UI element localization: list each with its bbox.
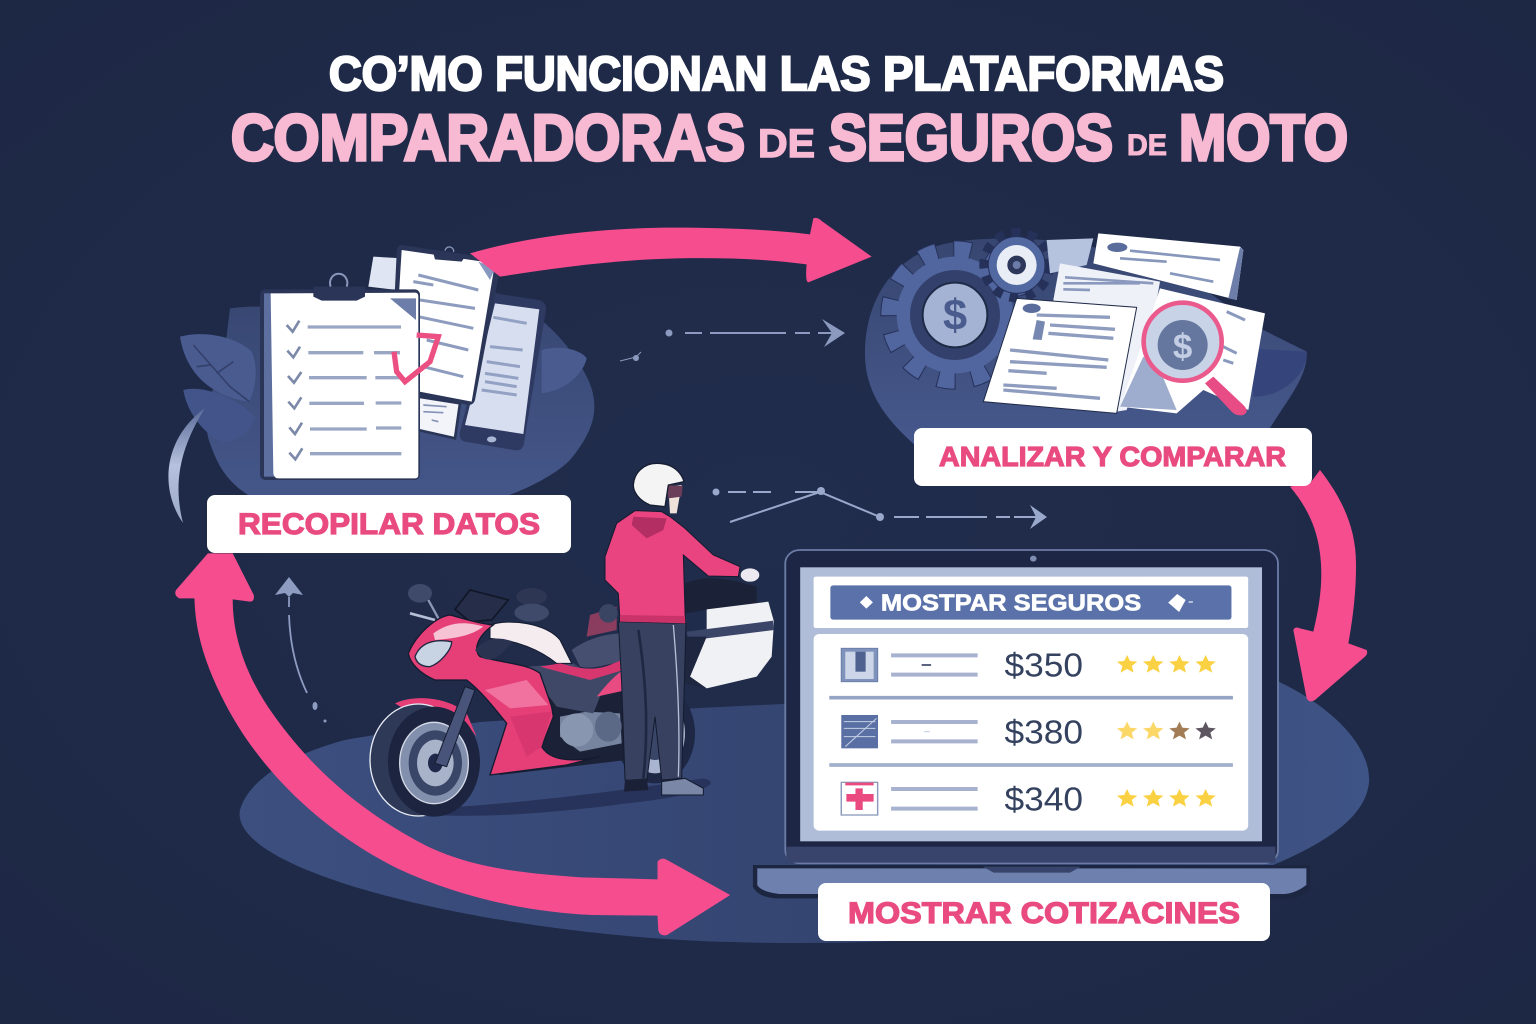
row 350: $350 <box>1005 647 1083 684</box>
title line 2: COMPARADORAS <box>231 101 745 174</box>
label: mostrar cotizaciones <box>818 883 1270 941</box>
title line 2: SEGUROS <box>829 101 1113 174</box>
laptop base <box>753 865 1310 898</box>
results card <box>814 634 1248 831</box>
ground shape <box>240 680 1369 943</box>
frame dark <box>500 663 627 775</box>
fairing <box>408 615 627 775</box>
dashed connector left <box>275 577 326 722</box>
seat <box>572 633 627 668</box>
panel: recopilar datos illustration <box>180 245 594 521</box>
tank white <box>490 622 572 663</box>
blob background <box>206 287 594 521</box>
windshield <box>455 590 508 622</box>
front document <box>983 298 1137 413</box>
header card: MOSTPAR SEGUROS <box>881 591 1141 616</box>
back clipboard <box>390 245 500 405</box>
mirrors <box>408 584 549 622</box>
label: mostrar cotizaciones: MOSTRAR COTIZACINES <box>848 897 1240 930</box>
row 350 <box>841 647 1216 684</box>
face <box>668 485 682 513</box>
header card <box>814 577 1248 628</box>
top case <box>685 578 774 688</box>
label: recopilar datos: RECOPILAR DATOS <box>238 508 540 541</box>
rear wheel <box>615 683 695 783</box>
engine <box>560 712 622 752</box>
back documents <box>1047 238 1093 273</box>
left leaves <box>180 334 256 442</box>
back paper <box>368 257 403 290</box>
label: recopilar datos <box>207 495 571 553</box>
arrow: recopilar to analizar <box>470 218 872 282</box>
magnifier: $ <box>1173 327 1192 366</box>
title <box>231 48 1348 174</box>
screen <box>800 567 1262 841</box>
magnifier <box>1144 303 1247 415</box>
leaf <box>1248 348 1307 397</box>
rider <box>605 463 759 795</box>
fender rear panel <box>597 668 630 697</box>
front fender <box>395 698 477 737</box>
label: analizar y comparar: ANALIZAR Y COMPARAR <box>939 441 1286 472</box>
arrow: mostrar to recopilar and back <box>175 553 730 935</box>
panel: analizar y comparar illustration <box>865 233 1307 447</box>
row 340: $340 <box>1005 781 1083 818</box>
dashed connector middle <box>712 487 1047 529</box>
return arc <box>168 408 205 523</box>
checklist <box>287 321 302 459</box>
title line 1: CO’MO FUNCIONAN LAS PLATAFORMAS <box>329 48 1224 101</box>
motorcycle and rider <box>370 463 774 817</box>
right leaf <box>542 348 587 393</box>
helmet <box>633 463 684 507</box>
big gear: $ <box>943 292 967 340</box>
label: analizar y comparar <box>914 428 1312 486</box>
fork <box>435 687 475 767</box>
laptop lid <box>785 550 1278 863</box>
blob background <box>865 238 1307 447</box>
shadow <box>393 778 711 816</box>
jacket <box>605 511 740 622</box>
laptop <box>753 550 1310 898</box>
front clipboard <box>260 274 420 480</box>
small gear <box>985 233 1048 297</box>
title line 2: DE <box>1127 129 1167 162</box>
dashed connector top <box>620 319 845 361</box>
arrow: analizar to mostrar <box>1290 470 1367 701</box>
big gear <box>890 250 1020 380</box>
front wheel <box>370 704 480 817</box>
title line 2: DE <box>758 122 815 166</box>
hand <box>741 568 759 582</box>
row 380: $380 <box>1005 714 1083 751</box>
tablet <box>460 293 546 450</box>
mid grey panel <box>527 663 623 713</box>
title line 2 <box>231 101 1348 174</box>
pants <box>618 622 686 782</box>
pink check mark <box>394 335 438 382</box>
title line 2: MOTO <box>1179 101 1348 174</box>
row 340 <box>841 781 1216 818</box>
row 380 <box>841 714 1216 751</box>
shoes <box>624 778 648 792</box>
